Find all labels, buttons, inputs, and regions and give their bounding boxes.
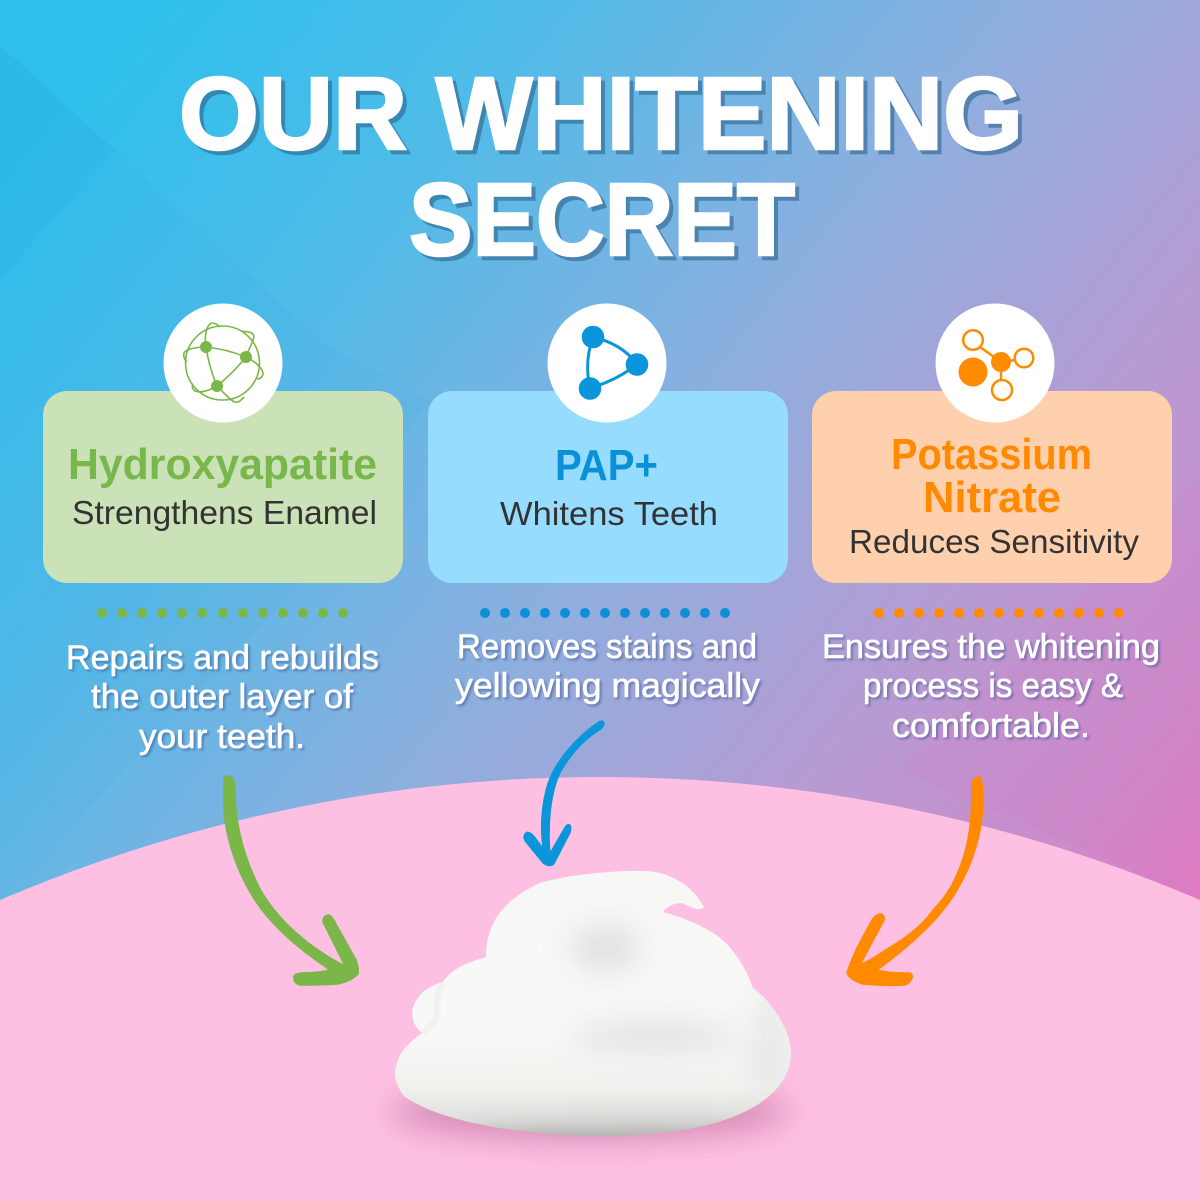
text: potassium nitrate description bbox=[822, 628, 1160, 745]
icon: hydroxyapatite sphere bbox=[164, 304, 282, 422]
arrow: blue bbox=[524, 721, 604, 866]
text: hydroxyapatite description bbox=[66, 639, 379, 756]
text: pap+ description: yellowing magically bbox=[455, 667, 760, 705]
label: reduces sensitivity: Reduces Sensitivity bbox=[849, 523, 1139, 560]
text: hydroxyapatite description: your teeth. bbox=[139, 718, 305, 756]
icon: pap+ molecule bbox=[548, 304, 666, 422]
text: pap+ description: Removes stains and bbox=[457, 628, 757, 666]
arrow: green bbox=[224, 776, 358, 985]
icon: potassium nitrate molecule bbox=[936, 304, 1054, 422]
label: strengthens enamel: Strengthens Enamel bbox=[72, 494, 377, 531]
heading: potassium nitrate: Potassium bbox=[891, 430, 1092, 479]
text: pap+ description bbox=[455, 628, 760, 705]
title bbox=[179, 56, 1023, 277]
text: potassium nitrate description: Ensures the whitening bbox=[822, 628, 1160, 666]
pink hill bbox=[0, 777, 1200, 1200]
panel: potassium nitrate bbox=[812, 391, 1172, 583]
text: hydroxyapatite description: Repairs and rebuilds bbox=[66, 639, 379, 677]
heading: potassium nitrate bbox=[891, 430, 1092, 522]
arrow: orange bbox=[847, 777, 983, 985]
text: potassium nitrate description: process is easy & bbox=[863, 667, 1123, 705]
dotted divider: orange bbox=[874, 608, 1124, 618]
panel: pap+ bbox=[428, 391, 788, 583]
title: SECRET bbox=[409, 162, 795, 277]
text: potassium nitrate description: comfortable. bbox=[892, 707, 1090, 745]
label: whitens teeth: Whitens Teeth bbox=[500, 495, 718, 532]
heading: pap+: PAP+ bbox=[555, 441, 658, 490]
dotted divider: green bbox=[97, 608, 348, 618]
heading: hydroxyapatite: Hydroxyapatite bbox=[68, 440, 377, 489]
heading: potassium nitrate: Nitrate bbox=[923, 473, 1061, 522]
dotted divider: blue bbox=[480, 608, 730, 618]
title: OUR WHITENING bbox=[179, 56, 1023, 171]
text: hydroxyapatite description: the outer layer of bbox=[91, 678, 354, 716]
foam product bbox=[390, 871, 830, 1163]
panel: hydroxyapatite bbox=[43, 391, 403, 583]
